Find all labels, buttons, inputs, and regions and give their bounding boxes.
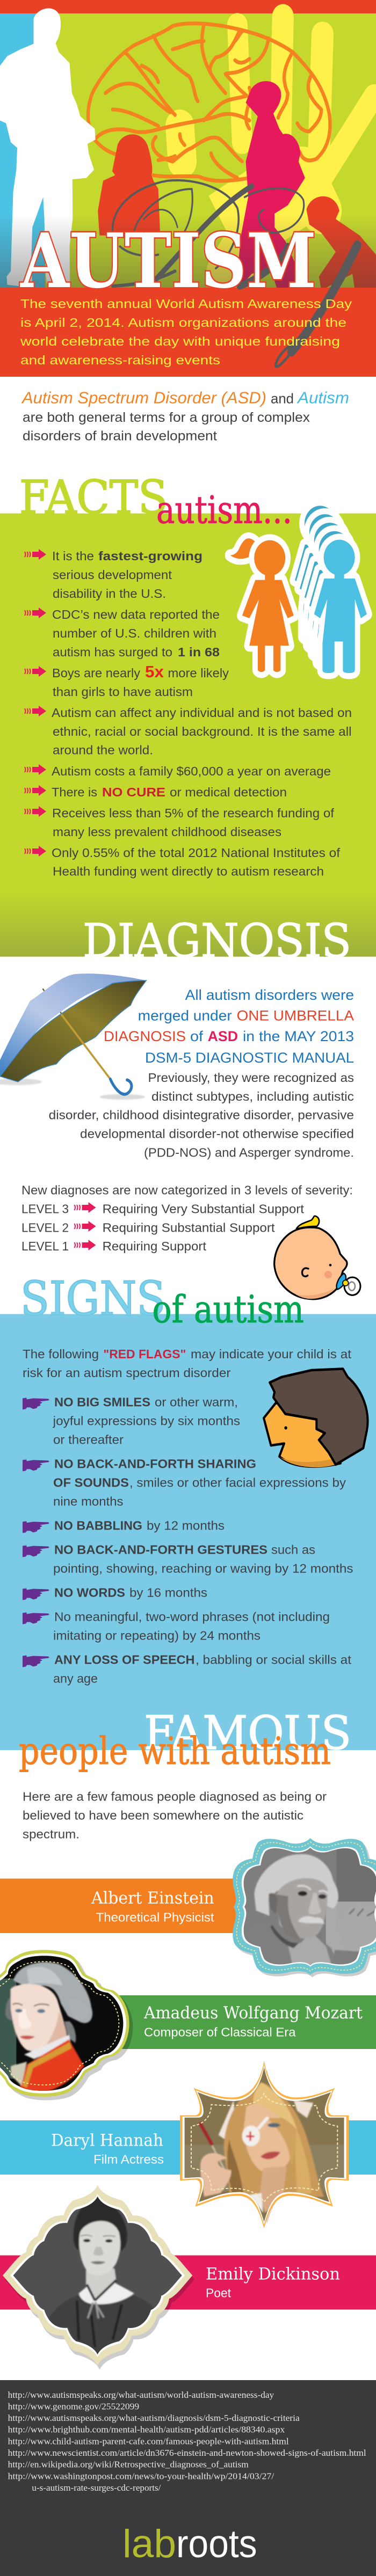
awareness day paragraph: and awareness-raising events [20, 353, 220, 367]
panel: hero banner [0, 0, 376, 377]
heading: FAMOUS: FAMOUS [144, 1707, 351, 1760]
famous intro: believed to have been somewhere on the autistic [23, 1809, 303, 1823]
flag 1: or other warm, [155, 1395, 238, 1409]
facts list [25, 549, 352, 878]
definition text: are both general terms for a group of complex [23, 410, 310, 425]
fact 8: Health funding went directly to autism research [53, 864, 324, 878]
flag 7: , babbling or social skills at [196, 1653, 351, 1667]
portrait [0, 1948, 134, 2101]
definition text: disorders of brain development [23, 428, 217, 443]
portrait [0, 2184, 195, 2370]
portrait [179, 2061, 351, 2229]
definition text: Autism Spectrum Disorder (ASD) [21, 389, 266, 407]
fact 6: or medical detection [170, 785, 287, 799]
source links: http://en.wikipedia.org/wiki/Retrospective_diagnoses_of_autism [8, 2459, 249, 2470]
flag 1: or thereafter [53, 1433, 124, 1447]
famous intro: Here are a few famous people diagnosed as being or [23, 1789, 327, 1803]
level 3 [21, 1202, 304, 1216]
source links: http://www.genome.gov/25522099 [8, 2401, 139, 2412]
flag 1: joyful expressions by six months [53, 1414, 240, 1428]
flag 7: any age [53, 1671, 98, 1685]
fact 8: Only 0.55% of the total 2012 National Institutes of [52, 846, 340, 860]
title: AUTISM: AUTISM [19, 217, 316, 305]
fact 2: number of U.S. children with [53, 626, 216, 640]
source links: http://www.autismspeaks.org/what-autism/world-autism-awareness-day [8, 2390, 274, 2400]
panel: sources footer [0, 2380, 376, 2576]
severity levels [21, 1183, 353, 1253]
fact 8 [25, 846, 340, 878]
fact 1: It is the [52, 549, 94, 563]
subtypes paragraph [49, 1071, 354, 1159]
fact 6 [25, 785, 287, 799]
flag 2: nine months [53, 1494, 124, 1508]
umbrella statement [104, 987, 354, 1066]
red crouching child silhouette [306, 196, 376, 290]
name: Amadeus Wolfgang Mozart [143, 2003, 363, 2023]
girl [230, 538, 294, 672]
fact 2: autism has surged to [53, 645, 172, 659]
flag 2: , smiles or other facial expressions by [129, 1476, 346, 1490]
name: Albert Einstein [91, 1889, 214, 1908]
awareness day paragraph: world celebrate the day with unique fundraising [20, 334, 340, 348]
name band [0, 1878, 239, 1933]
umbrella statement: in the MAY 2013 [243, 1028, 354, 1044]
umbrella statement: merged under [138, 1008, 232, 1024]
red flags intro: "RED FLAGS" [103, 1347, 186, 1361]
flag 3 [23, 1519, 225, 1533]
awareness day paragraph: The seventh annual World Autism Awareness Day [20, 297, 352, 311]
person: Daryl Hannah [0, 2061, 376, 2229]
red flags intro [23, 1347, 351, 1380]
logo: labroots [122, 2522, 257, 2566]
fact 4: Autism can affect any individual and is not based on [52, 706, 352, 720]
level 1: LEVEL 1 [21, 1239, 69, 1253]
flag 2: OF SOUNDS [53, 1476, 129, 1490]
role: Theoretical Physicist [96, 1911, 214, 1924]
fact 1: fastest-growing [98, 549, 203, 563]
fact 7: Receives less than 5% of the research funding of [52, 806, 334, 820]
fact 3: than girls to have autism [53, 685, 193, 699]
level 2: LEVEL 2 [21, 1220, 69, 1234]
subheading: autism...: autism... [156, 488, 292, 532]
source links: http://www.washingtonpost.com/news/to-your-health/wp/2014/03/27/ [8, 2471, 274, 2482]
flag 6: No meaningful, two-word phrases (not including [54, 1610, 330, 1624]
heading: SIGNS: SIGNS [20, 1271, 165, 1326]
logo: labroots: roots [176, 2522, 257, 2566]
definition text: Autism [297, 389, 349, 407]
flag 1 [23, 1395, 240, 1447]
pink child silhouette [236, 81, 305, 293]
flag 5: by 16 months [129, 1585, 207, 1599]
flag 5: NO WORDS [54, 1585, 125, 1599]
fact 2: CDC’s new data reported the [52, 608, 220, 621]
person: Amadeus Wolfgang Mozart [0, 1948, 376, 2101]
fact 4: around the world. [53, 743, 153, 757]
footer background [0, 2380, 376, 2576]
portrait [233, 1837, 376, 1978]
name: Emily Dickinson [206, 2265, 340, 2284]
fact 4 [25, 706, 352, 757]
level 3: LEVEL 3 [21, 1202, 69, 1216]
subtypes paragraph: distinct subtypes, including autistic [151, 1089, 354, 1103]
fact 5: Autism costs a family $60,000 a year on average [52, 764, 331, 778]
flag 4: such as [271, 1542, 315, 1556]
name band [0, 2255, 376, 2310]
panel: famous people [0, 1729, 376, 2370]
fact 3: more likely [168, 666, 229, 680]
person: Emily Dickinson [0, 2184, 376, 2370]
flag 3: NO BABBLING [54, 1519, 142, 1533]
umbrella statement: All autism disorders were [185, 987, 354, 1003]
white adult silhouette [0, 8, 96, 288]
person: Albert Einstein [0, 1837, 376, 1978]
red flags intro: may indicate your child is at [191, 1347, 351, 1361]
fact 6: NO CURE [102, 785, 165, 799]
red flags list [23, 1395, 353, 1685]
panel: signs [0, 1271, 376, 1760]
flag 4: pointing, showing, reaching or waving by 12 months [53, 1562, 353, 1576]
level 1 [21, 1239, 206, 1253]
awareness day paragraph: is April 2, 2014. Autism organizations around the [20, 316, 346, 330]
fact 1: serious development [53, 568, 172, 582]
definition text [21, 389, 349, 443]
umbrella statement: ONE UMBRELLA [237, 1008, 354, 1024]
logo: labroots: lab [122, 2522, 176, 2566]
source links: http://www.child-autism-parent-cafe.com/famous-people-with-autism.html [8, 2436, 289, 2446]
umbrella statement: DSM-5 DIAGNOSTIC MANUAL [145, 1050, 354, 1066]
umbrella statement: DIAGNOSIS [104, 1028, 186, 1044]
yellow hand print [180, 17, 374, 274]
bottom shading of the hero image [0, 215, 376, 288]
name band [118, 1995, 376, 2049]
icon: girl and row of boys [230, 506, 367, 673]
severity levels: New diagnoses are now categorized in 3 levels of severity: [21, 1183, 353, 1197]
panel: facts [0, 471, 376, 968]
grey scribble [113, 180, 357, 367]
name band [0, 2120, 376, 2175]
heading: DIAGNOSIS: DIAGNOSIS [83, 914, 351, 968]
umbrella statement: of [190, 1028, 204, 1044]
red intro band [0, 288, 376, 377]
subheading: of autism: of autism [153, 1287, 304, 1331]
flag 7 [23, 1653, 351, 1685]
icon: baby with pacifier [274, 1216, 360, 1299]
awareness day paragraph [20, 297, 352, 367]
facts background [0, 514, 376, 957]
level 2: Requiring Substantial Support [103, 1220, 275, 1234]
source links: http://www.brighthub.com/mental-health/autism-pdd/articles/88340.aspx [8, 2425, 285, 2434]
red girl silhouette [98, 134, 160, 236]
fact 4: ethnic, racial or social background. It is the same all [53, 724, 351, 738]
flag 6 [23, 1610, 330, 1642]
fact 3: 5x [145, 662, 164, 681]
fact 7: many less prevalent childhood diseases [53, 825, 281, 839]
flag 3: by 12 months [147, 1519, 225, 1533]
flag 7: ANY LOSS OF SPEECH [54, 1653, 194, 1667]
signs background [0, 1314, 376, 1750]
definition text: and [271, 391, 294, 407]
flag 2: NO BACK-AND-FORTH SHARING [54, 1457, 256, 1470]
famous intro [23, 1789, 327, 1841]
orange brain [88, 24, 330, 181]
panel: diagnosis [0, 974, 360, 1299]
source links: u-s-autism-rate-surges-cdc-reports/ [32, 2483, 161, 2493]
source links: http://www.autismspeaks.org/what-autism/diagnosis/dsm-5-diagnostic-criteria [8, 2413, 300, 2423]
subtypes paragraph: developmental disorder-not otherwise specified [80, 1127, 354, 1141]
subtypes paragraph: Previously, they were recognized as [148, 1071, 354, 1085]
illustration: hand print, brain and silhouettes [0, 8, 376, 293]
fact 7 [25, 806, 334, 839]
level 2 [21, 1220, 275, 1234]
role: Composer of Classical Era [144, 2025, 296, 2039]
flag 2 [23, 1457, 346, 1508]
red flags intro: The following [23, 1347, 99, 1361]
stacked boys [295, 506, 367, 673]
flag 5 [23, 1585, 207, 1600]
famous intro: spectrum. [23, 1827, 79, 1841]
red flags intro: risk for an autism spectrum disorder [23, 1366, 231, 1380]
fact 3 [25, 662, 229, 699]
flag 4: NO BACK-AND-FORTH GESTURES [54, 1542, 267, 1556]
fact 3: Boys are nearly [52, 666, 140, 680]
flag 6: imitating or repeating) by 24 months [53, 1628, 261, 1642]
subtypes paragraph: (PDD-NOS) and Asperger syndrome. [144, 1145, 354, 1159]
name: Daryl Hannah [51, 2131, 163, 2150]
level 1: Requiring Support [103, 1239, 206, 1253]
hero background [0, 0, 376, 288]
level 3: Requiring Very Substantial Support [103, 1202, 304, 1216]
umbrella statement: ASD [208, 1028, 238, 1044]
fact 1 [25, 549, 203, 601]
role: Poet [206, 2286, 231, 2300]
flag 1: NO BIG SMILES [54, 1395, 150, 1409]
role: Film Actress [93, 2152, 164, 2166]
flag 4 [23, 1542, 353, 1576]
fact 6: There is [52, 785, 97, 799]
heading: FACTS: FACTS [19, 471, 168, 524]
subtypes paragraph: disorder, childhood disintegrative disorder, pervasive [49, 1108, 354, 1122]
icon: boy head [264, 1369, 368, 1467]
fact 2 [25, 608, 220, 659]
icon: umbrella [0, 974, 146, 1100]
source links: http://www.newscientist.com/article/dn3676-einstein-and-newton-showed-signs-of-autism.html [8, 2448, 366, 2458]
subheading: people with autism: people with autism [19, 1729, 331, 1773]
source links [8, 2390, 366, 2493]
fact 2: 1 in 68 [178, 645, 220, 659]
fact 1: disability in the U.S. [53, 587, 166, 601]
